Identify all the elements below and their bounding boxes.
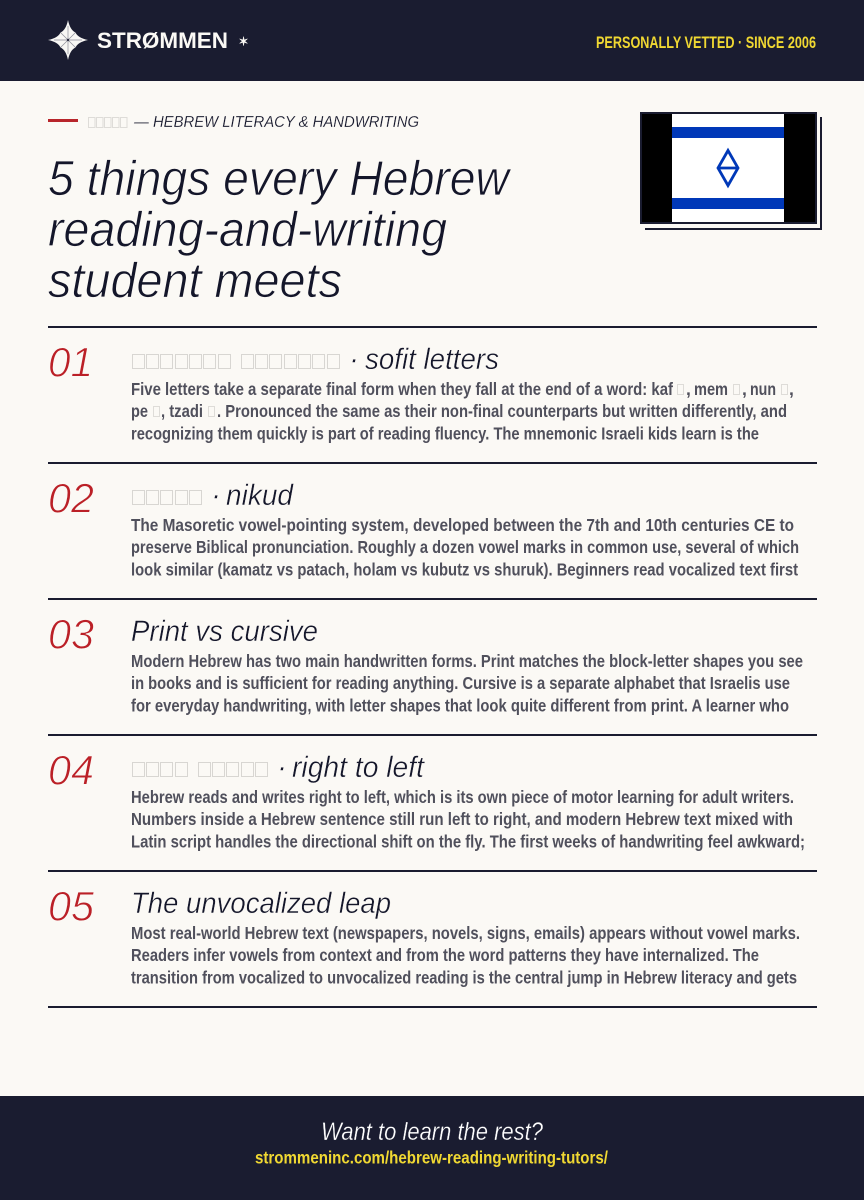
header band	[0, 0, 864, 81]
main title: 5 things every Hebrew	[48, 152, 512, 206]
brand name: STRØMMEN	[97, 28, 228, 53]
item 03: print vs cursive: 03	[48, 610, 94, 658]
item 01: sofit letters: ·	[349, 343, 359, 376]
main title	[48, 152, 512, 308]
item 01: sofit letters: ,	[742, 379, 747, 399]
item 01: sofit letters: recognizing them quickly is part of reading fluency. The mnemonic Israeli kids learn is the	[131, 424, 759, 444]
item 01: sofit letters: ,	[686, 379, 691, 399]
main title: student meets	[48, 254, 342, 308]
item 02: nikud	[48, 474, 799, 580]
item 04: right to left: ·	[277, 751, 287, 784]
item 01: sofit letters: nun	[750, 379, 776, 399]
footer prompt: Want to learn the rest?	[321, 1118, 543, 1146]
footer band	[0, 1096, 864, 1200]
item 01: sofit letters	[48, 338, 794, 444]
footer url: strommeninc.com/hebrew-reading-writing-tutors/	[255, 1148, 608, 1168]
item 04: right to left: 04	[48, 746, 94, 794]
icon: small star: ✶	[238, 34, 249, 48]
item 01: sofit letters: pe	[131, 401, 148, 421]
eyebrow: — HEBREW LITERACY & HANDWRITING	[133, 114, 419, 131]
item 05: the unvocalized leap: 05	[48, 882, 95, 930]
item 01: sofit letters: , tzadi	[161, 401, 203, 421]
item 01: sofit letters: sofit letters	[365, 343, 499, 376]
icon: Israeli flag card	[641, 113, 821, 229]
item 02: nikud: 02	[48, 474, 94, 522]
item 01: sofit letters: ,	[789, 379, 794, 399]
item 01: sofit letters: Five letters take a separate final form when they fall at the end of a word: kaf	[131, 379, 673, 399]
icon: compass star logo	[48, 20, 88, 60]
main title: reading-and-writing	[48, 203, 447, 257]
dividers	[48, 326, 817, 1008]
item 01: sofit letters: 01	[48, 338, 93, 386]
item 02: nikud: The Masoretic vowel-pointing system, developed between the 7th and 10th centuries CE to	[131, 515, 794, 535]
item 05: the unvocalized leap: The unvocalized leap	[131, 887, 391, 920]
item 05: the unvocalized leap: Readers infer vowels from context and from the word patterns they have internalized. The	[131, 945, 759, 965]
item 01: sofit letters: mem	[694, 379, 728, 399]
item 04: right to left	[48, 746, 805, 852]
item 04: right to left: right to left	[292, 751, 426, 784]
item 02: nikud: ·	[211, 479, 221, 512]
item 05: the unvocalized leap	[48, 882, 800, 988]
item 02: nikud: nikud	[226, 479, 294, 512]
item 03: print vs cursive	[48, 610, 803, 716]
item 03: print vs cursive: Print vs cursive	[131, 615, 318, 648]
